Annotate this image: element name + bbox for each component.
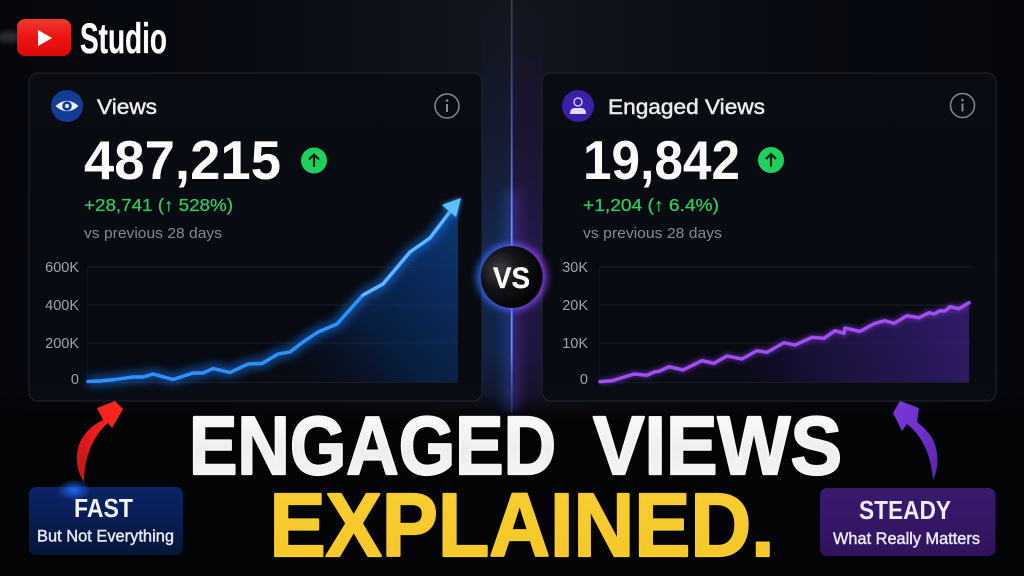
heading: Views: Views: [97, 96, 157, 119]
center divider line: [505, 0, 519, 412]
badge: STEADY: [820, 488, 996, 556]
title line: EXPLAINED.: EXPLAINED.: [270, 476, 774, 576]
chart: views line chart: 0: [71, 372, 79, 388]
chart: views line chart: 600K: [45, 260, 79, 276]
icon: person: [562, 90, 594, 122]
logo: YouTube Studio: [0, 15, 167, 63]
VS badge: VS: [493, 262, 530, 295]
badge text: What Really Matters: What Really Matters: [833, 530, 980, 548]
metric: 19,842: 19,842: [583, 129, 740, 191]
chart: engaged views line chart: 0: [580, 372, 588, 388]
chart: engaged views line chart: 10K: [562, 336, 588, 352]
caption: vs previous 28 days: vs previous 28 days: [583, 225, 722, 242]
icon: info: [435, 94, 459, 118]
icon: info: [950, 94, 974, 118]
panel: Views: [29, 73, 482, 401]
icon: eye: [51, 90, 83, 122]
caption: vs previous 28 days: vs previous 28 days: [84, 225, 222, 242]
chart: views line chart: 400K: [45, 298, 79, 314]
arrow: purple curved: [893, 401, 937, 480]
badge heading: STEADY: STEADY: [859, 497, 951, 525]
title word: ENGAGED: ENGAGED: [189, 399, 556, 492]
metric: 487,215: 487,215: [84, 129, 281, 191]
title: ENGAGED VIEWS EXPLAINED.: [189, 399, 842, 576]
heading: Engaged Views: Engaged Views: [608, 96, 765, 119]
panel: Engaged Views: [542, 73, 996, 401]
icon: green up arrow: [758, 147, 784, 173]
chart: views line chart: [45, 198, 461, 388]
icon: green up arrow: [301, 148, 327, 174]
badge: FAST: [29, 479, 183, 555]
chart: engaged views line chart: 30K: [562, 260, 588, 276]
logo wordmark: Studio: [80, 15, 167, 63]
icon: motion smear: [0, 31, 21, 43]
arrow: red curved: [77, 401, 123, 482]
chart: engaged views line chart: 20K: [562, 298, 588, 314]
VS badge: [476, 245, 547, 309]
badge text: But Not Everything: But Not Everything: [37, 528, 174, 546]
chart: views line chart: 200K: [45, 336, 79, 352]
icon: YouTube play button: [17, 19, 71, 56]
chart: engaged views line chart: [562, 260, 970, 388]
change: +28,741: +28,741 (↑ 528%): [84, 195, 233, 215]
title word: VIEWS: VIEWS: [593, 399, 842, 492]
change: +1,204: +1,204 (↑ 6.4%): [583, 195, 719, 215]
badge heading: FAST: FAST: [74, 493, 133, 523]
